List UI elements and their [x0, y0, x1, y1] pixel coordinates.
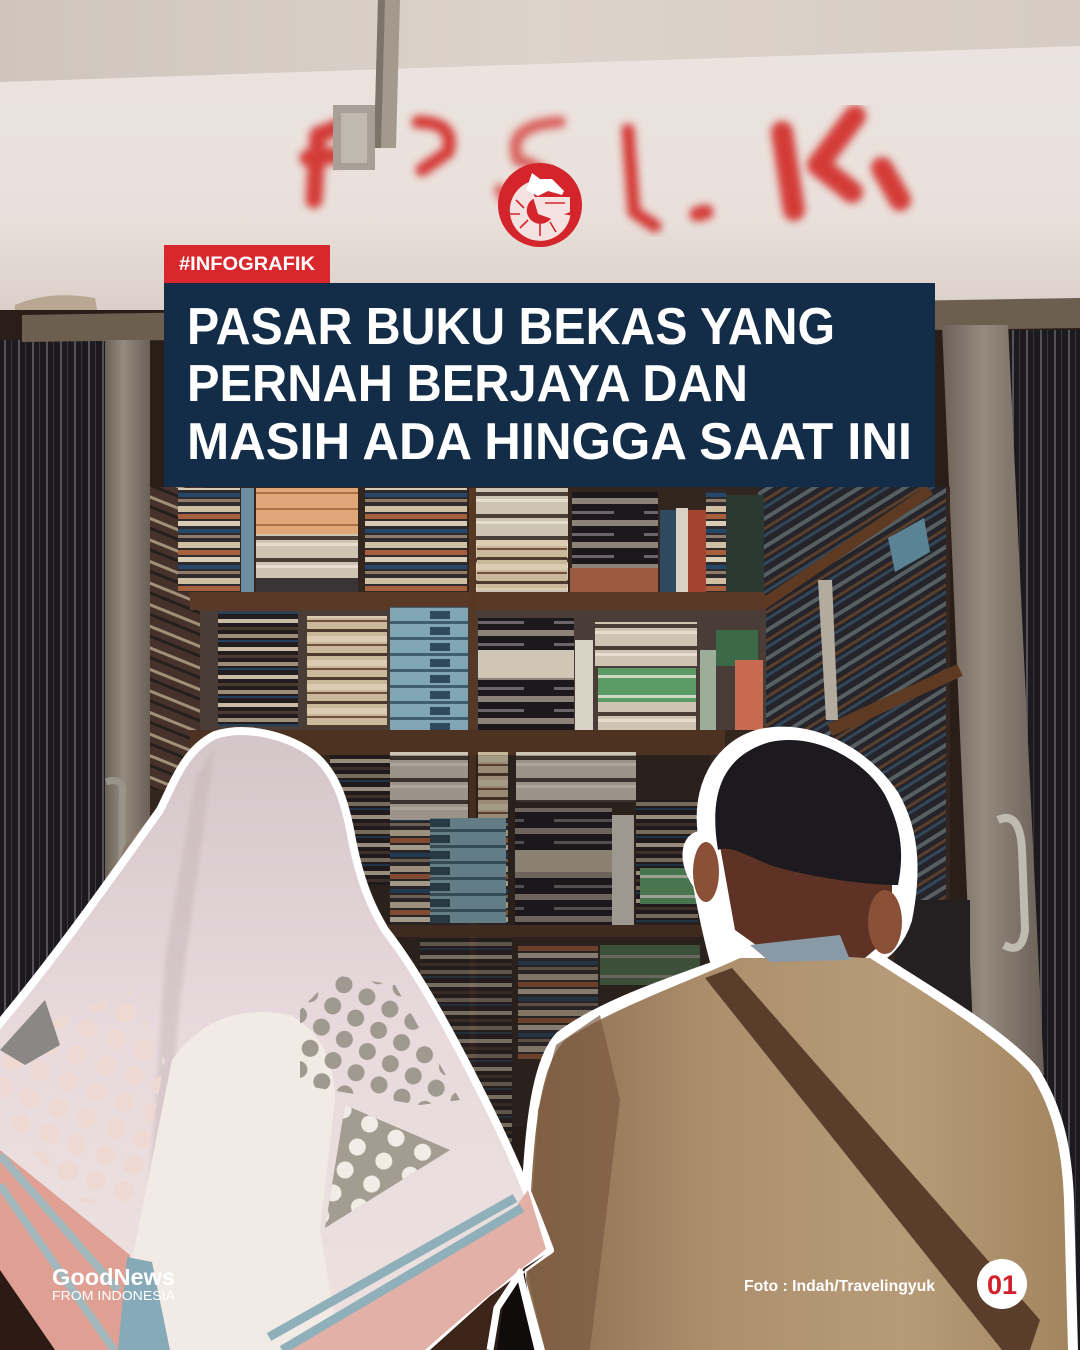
sleeve shadow: [528, 1015, 620, 1350]
page number badge: [977, 1259, 1027, 1309]
lower-left dark gap between figures: [430, 1254, 546, 1350]
dark corner: [0, 1270, 55, 1350]
neck and head skin: [718, 835, 892, 958]
shoulder behind scarf: [110, 803, 165, 885]
lower shelf board: [380, 925, 710, 937]
scarf scallop panel: [132, 1012, 340, 1350]
right door frame: [942, 325, 1044, 1075]
hair: [715, 740, 901, 885]
wood diagonal boards: [762, 490, 960, 730]
brand: GoodNews From Indonesia: [52, 1264, 176, 1303]
blue book on wing: [888, 518, 930, 572]
white book-end column: [818, 580, 838, 720]
scarf fabric with white cut-out outline: [0, 731, 550, 1350]
blue hem stripes right: [269, 1198, 522, 1350]
grey triangle with dots: [325, 1105, 450, 1228]
person: woman in patterned headscarf: [0, 731, 550, 1350]
photo credit: Foto : Indah/Travelingyuk: [744, 1278, 935, 1295]
red graffiti on wall: [308, 116, 900, 226]
bag strap: [705, 968, 1040, 1350]
bottom row stacks: [420, 937, 700, 1177]
title block: [164, 283, 935, 487]
bookshelf interior: [150, 487, 970, 1185]
left rolling shutter: [0, 340, 105, 1350]
peach dot pattern: [0, 990, 165, 1210]
blue vertical fold: [118, 1257, 170, 1350]
page number badge: 01: [987, 1270, 1017, 1300]
door header beam: [22, 298, 1080, 342]
vertical divider: [469, 488, 476, 1128]
middle shelf board: [190, 730, 725, 755]
pink hem right: [290, 1190, 546, 1350]
title block: PERNAH BERJAYA DAN: [187, 355, 748, 413]
tag: #INFOGRAFIK: #INFOGRAFIK: [179, 254, 315, 275]
left door handle: [106, 780, 123, 860]
left door frame: [105, 340, 150, 1040]
shop interior backdrop: [0, 310, 1080, 1350]
shelf back: [150, 487, 950, 1127]
top shelf board: [190, 592, 765, 610]
wall bracket: [333, 0, 400, 170]
right shelf wing: [758, 487, 946, 940]
man white cut-out outline: [520, 731, 1074, 1350]
glass reflection shade over lower rows: [330, 755, 710, 1185]
middle row stacks: [200, 607, 766, 735]
right rolling shutter: [1010, 330, 1080, 1350]
lower row stacks: [330, 752, 698, 926]
ears: [693, 842, 902, 954]
shirt: [526, 958, 1068, 1350]
collar: [750, 935, 850, 962]
person: man with shoulder bag: [520, 731, 1074, 1350]
brand: GoodNews From Indonesia: GoodNews: [52, 1264, 175, 1290]
brand: GoodNews From Indonesia: FROM INDONESIA: [52, 1289, 176, 1303]
right door handle: [998, 818, 1025, 948]
right lower doorway books: [895, 900, 970, 1010]
dark triangle at left: [0, 1000, 60, 1065]
title block: PASAR BUKU BEKAS YANG: [187, 298, 835, 356]
wall and ceiling: [0, 0, 1080, 330]
scarf fold shadow: [145, 745, 215, 1250]
logo: Garuda emblem: [498, 163, 582, 247]
grey dot pattern: [300, 975, 460, 1105]
top row stacks: [178, 488, 764, 596]
pink hem left: [0, 1150, 130, 1350]
left shelf wing: [150, 487, 205, 790]
tag: #INFOGRAFIK: [164, 245, 330, 283]
blue hem stripes left: [0, 1155, 118, 1350]
title block: MASIH ADA HINGGA SAAT INI: [187, 413, 912, 471]
